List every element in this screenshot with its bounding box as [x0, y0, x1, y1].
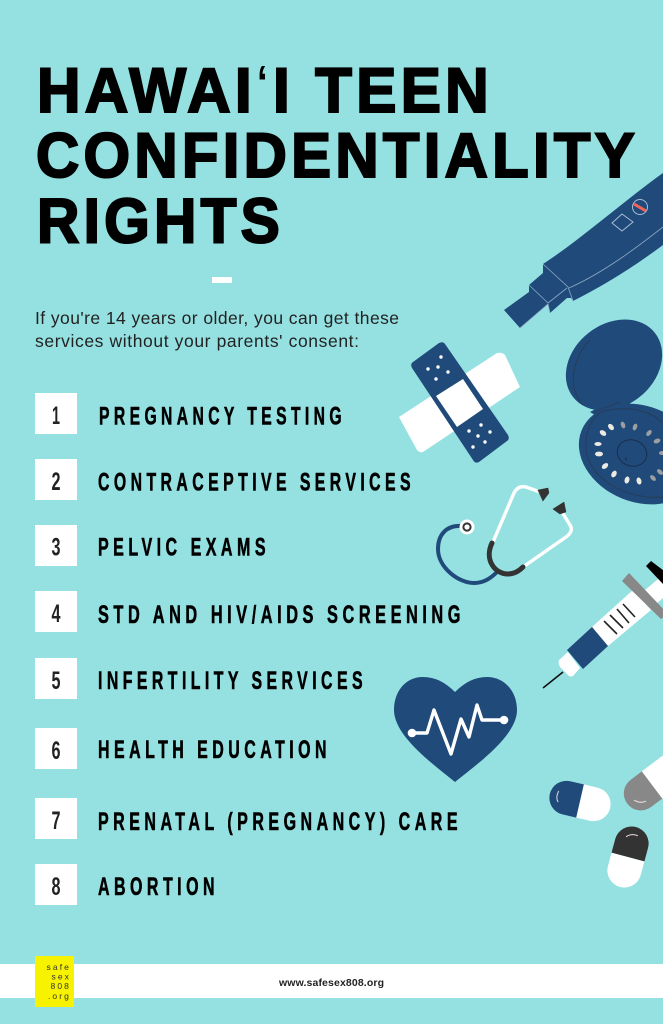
- item 5: INFERTILITY SERVICES: [98, 667, 367, 695]
- title: CONFIDENTIALITY: [36, 121, 639, 191]
- item 3: [35, 525, 270, 566]
- intro text: [35, 308, 399, 351]
- item 8: ABORTION: [98, 873, 219, 901]
- icon: heart with pulse: [394, 677, 517, 782]
- item 8: 8: [52, 873, 61, 901]
- item 5: [35, 658, 367, 699]
- title: ʻ: [256, 56, 273, 123]
- item 8: [35, 864, 219, 905]
- item 4: 4: [52, 600, 61, 628]
- title: RIGHTS: [37, 186, 284, 256]
- title accent dash: [212, 277, 232, 283]
- title: I TEEN: [273, 56, 493, 126]
- icon: bandage: [399, 342, 520, 463]
- item 7: [35, 798, 462, 839]
- item 1: PREGNANCY TESTING: [99, 402, 346, 430]
- footer url: www.safesex808.org: [278, 977, 384, 989]
- icon: black and white capsule: [604, 823, 652, 891]
- item 1: 1: [52, 402, 60, 430]
- item 2: [35, 459, 415, 500]
- footer logo: sex: [51, 972, 71, 982]
- footer logo: safe: [47, 962, 71, 972]
- item 1: [35, 393, 346, 434]
- icon: grey and white capsule: [617, 753, 663, 817]
- footer logo: .org: [48, 991, 71, 1001]
- intro text: services without your parents' consent:: [35, 331, 359, 351]
- icon: pregnancy test: [504, 173, 663, 328]
- item 6: [35, 728, 331, 769]
- icon: syringe: [543, 561, 663, 688]
- item 7: PRENATAL (PREGNANCY) CARE: [98, 808, 462, 836]
- title: [36, 56, 639, 256]
- item 2: 2: [52, 468, 60, 496]
- item 3: 3: [52, 534, 60, 562]
- footer logo: 808: [51, 981, 71, 991]
- item 6: 6: [52, 737, 60, 765]
- item 7: 7: [52, 807, 60, 835]
- icon: blue and white capsule: [546, 777, 614, 825]
- item 4: STD AND HIV/AIDS SCREENING: [98, 601, 465, 629]
- item 4: [35, 591, 465, 632]
- intro text: If you're 14 years or older, you can get these: [35, 308, 399, 328]
- numbered list: [35, 393, 465, 905]
- item 2: CONTRACEPTIVE SERVICES: [98, 468, 415, 496]
- title: HAWAI: [37, 56, 266, 126]
- item 6: HEALTH EDUCATION: [98, 736, 331, 764]
- footer band: [0, 964, 663, 998]
- icon: birth control pill case: [548, 301, 663, 522]
- item 5: 5: [52, 667, 61, 695]
- footer logo: [35, 956, 74, 1007]
- icon: stethoscope: [438, 487, 571, 583]
- item 3: PELVIC EXAMS: [98, 534, 270, 562]
